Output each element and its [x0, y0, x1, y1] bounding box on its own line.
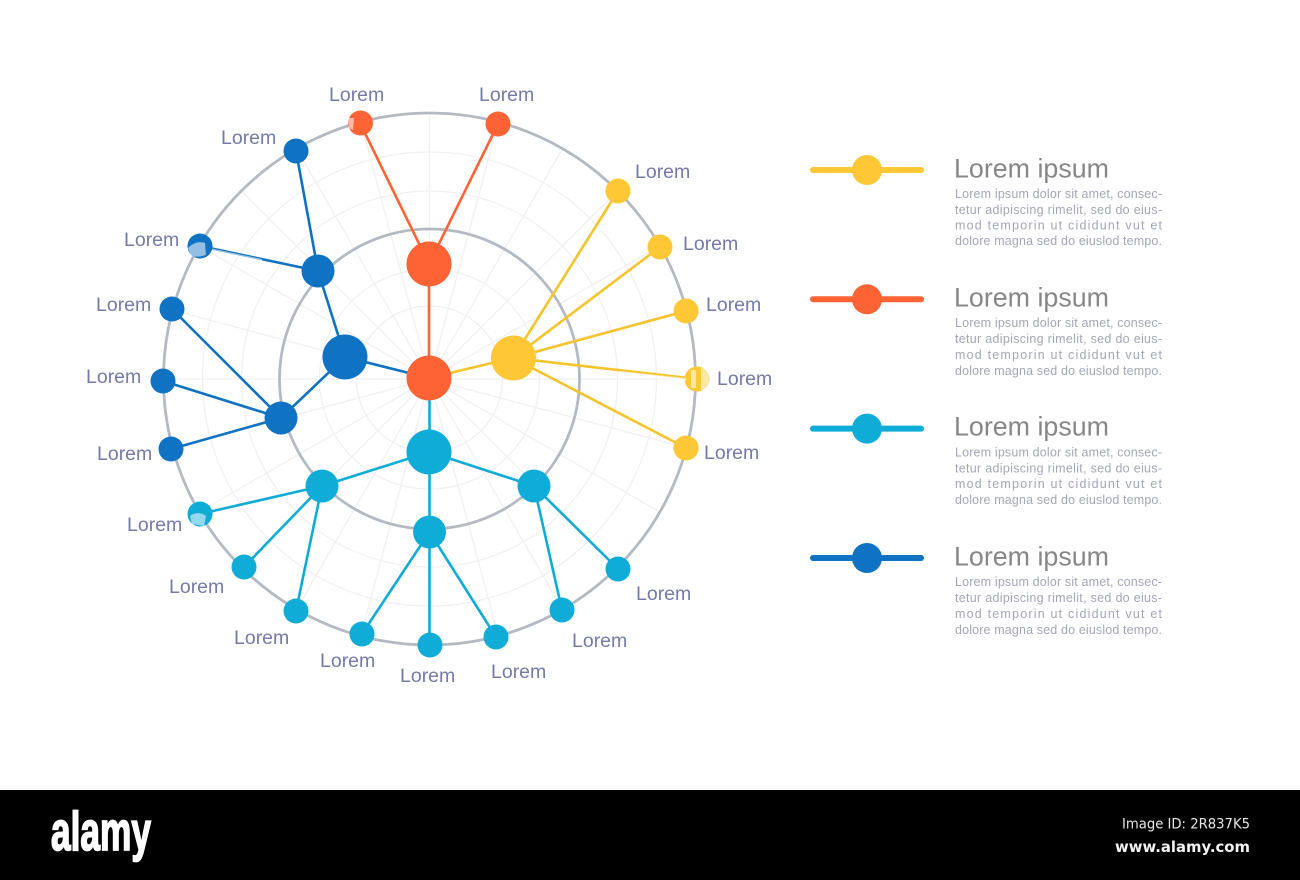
node labels: Lorem — [96, 294, 151, 316]
node labels: Lorem — [221, 127, 276, 149]
watermark footer bar: www.alamy.com — [1115, 838, 1250, 856]
node labels: Lorem — [704, 442, 759, 464]
legend item: orange: tetur adipiscing rimelit, sed do eius- — [955, 332, 1162, 346]
legend item: blue — [813, 542, 1163, 637]
legend item: yellow: mod temporin ut cididunt vut et — [955, 218, 1163, 232]
legend item: yellow: Lorem ipsum dolor sit amet, consec- — [955, 187, 1162, 201]
node labels: Lorem — [329, 84, 384, 106]
node labels: Lorem — [636, 583, 691, 605]
legend item: yellow: Lorem ipsum — [954, 154, 1109, 184]
legend item: yellow: tetur adipiscing rimelit, sed do eius- — [955, 203, 1162, 217]
legend item: orange: mod temporin ut cididunt vut et — [955, 348, 1163, 362]
node labels: Lorem — [706, 294, 761, 316]
node labels: Lorem — [479, 84, 534, 106]
node labels: Lorem — [400, 665, 455, 687]
node labels: Lorem — [127, 514, 182, 536]
legend item: blue: Lorem ipsum — [954, 542, 1109, 572]
node labels: Lorem — [635, 161, 690, 183]
node labels: Lorem — [491, 661, 546, 683]
legend item: blue: Lorem ipsum dolor sit amet, consec- — [955, 575, 1162, 589]
network: yellow branch — [429, 178, 710, 460]
network: orange branch — [348, 110, 510, 400]
node labels: Lorem — [169, 576, 224, 598]
node labels: Lorem — [97, 443, 152, 465]
legend item: blue: dolore magna sed do eiuslod tempo. — [955, 623, 1162, 637]
watermark footer bar: Image ID: 2R837K5 — [1122, 816, 1250, 832]
legend item: orange: dolore magna sed do eiuslod tempo. — [955, 364, 1162, 378]
watermark footer bar — [0, 790, 1300, 880]
legend item: cyan: tetur adipiscing rimelit, sed do eius- — [955, 462, 1162, 476]
legend item: cyan: Lorem ipsum — [954, 412, 1109, 442]
node labels: Lorem — [572, 630, 627, 652]
watermark fade artifacts — [188, 118, 709, 526]
radial grid — [164, 114, 694, 644]
node labels: Lorem — [683, 233, 738, 255]
node labels: Lorem — [86, 366, 141, 388]
legend item: cyan — [813, 412, 1163, 507]
legend item: orange — [813, 282, 1163, 378]
node labels: Lorem — [124, 229, 179, 251]
node labels: Lorem — [320, 650, 375, 672]
network: cyan branch — [188, 378, 630, 658]
node labels: Lorem — [234, 627, 289, 649]
legend item: cyan: dolore magna sed do eiuslod tempo. — [955, 493, 1162, 507]
legend item: yellow — [813, 154, 1163, 248]
watermark footer bar: alamy — [51, 800, 151, 862]
legend item: orange: Lorem ipsum — [954, 282, 1109, 312]
outer and inner rings — [164, 113, 696, 645]
legend item: orange: Lorem ipsum dolor sit amet, consec- — [955, 316, 1162, 330]
legend item: cyan: mod temporin ut cididunt vut et — [955, 477, 1163, 491]
legend item: blue: mod temporin ut cididunt vut et — [955, 607, 1163, 621]
legend item: cyan: Lorem ipsum dolor sit amet, consec- — [955, 446, 1162, 460]
legend item: yellow: dolore magna sed do eiuslod tempo. — [955, 234, 1162, 248]
legend item: blue: tetur adipiscing rimelit, sed do eius- — [955, 591, 1162, 605]
network: blue branch — [150, 138, 429, 462]
node labels: Lorem — [717, 368, 772, 390]
node labels — [86, 84, 772, 687]
